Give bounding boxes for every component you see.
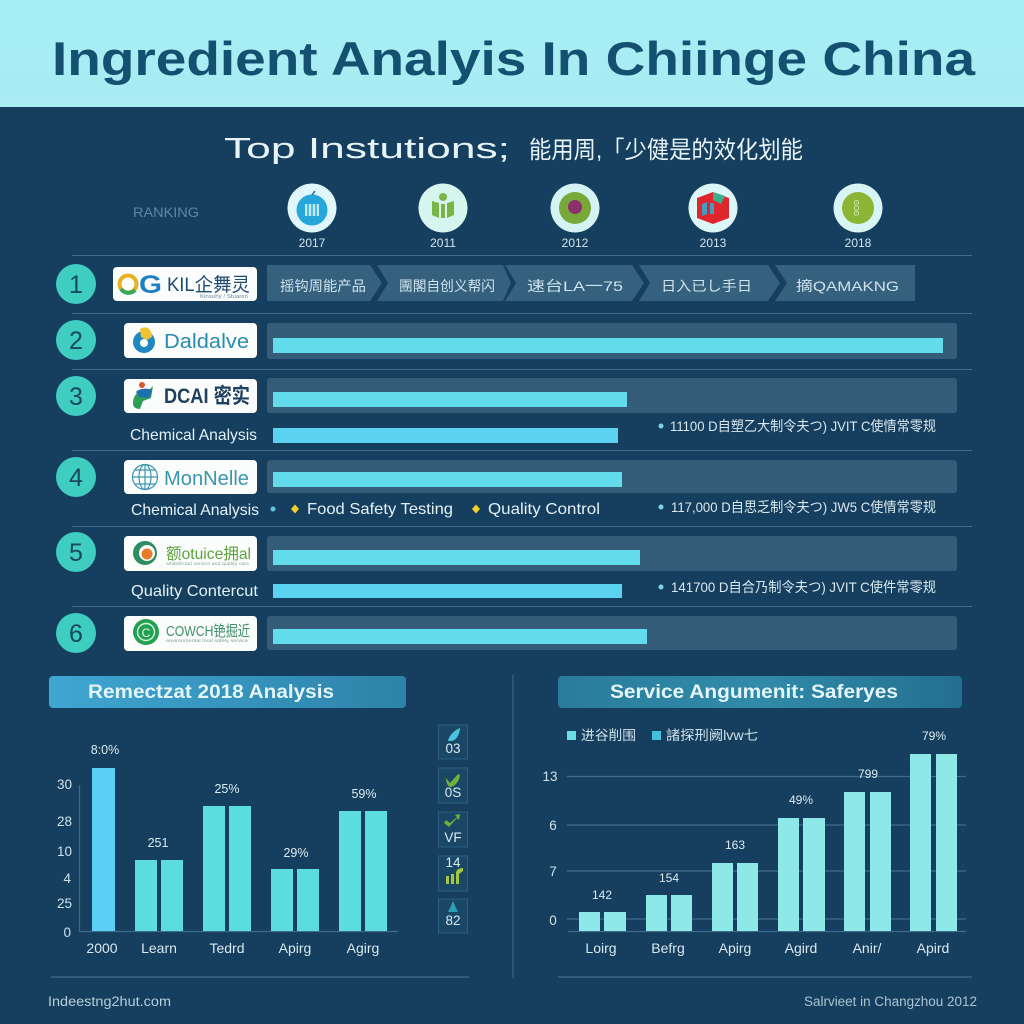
left bar chart: 8:0%	[91, 743, 119, 757]
right bar chart: 49%	[789, 793, 813, 807]
rank badges: 5	[69, 539, 83, 567]
bars: ranking values	[273, 338, 943, 644]
left bar chart	[57, 743, 398, 956]
logo: rank 3: DCAI 密实	[164, 384, 250, 408]
logo: rank 1: Kinsuhy / Stuaren	[200, 294, 248, 300]
right bar chart: 6	[549, 818, 557, 833]
section heading: Top Instutions;	[224, 133, 510, 165]
left bar chart: Agirg	[347, 940, 379, 956]
left footer rule	[51, 976, 469, 978]
rank badges	[56, 264, 96, 653]
left bar chart: 10	[57, 844, 72, 859]
logo: rank 6: COWCH铯掘近	[166, 623, 250, 640]
logo: rank 1	[113, 267, 257, 301]
row captions: Food Safety Testing	[307, 501, 453, 518]
rank badges: 1	[69, 271, 83, 299]
right bar chart: Befrg	[651, 940, 685, 956]
icon: 2017: 2017	[299, 236, 326, 250]
caption markers	[270, 504, 480, 514]
rank badges: 2	[69, 327, 83, 355]
side indicator tiles: 03	[445, 741, 461, 756]
chevron row: rank 1: 團閣自创义帮闪	[399, 278, 495, 294]
right bar chart: 142	[592, 888, 612, 902]
year icons row	[288, 184, 882, 250]
side indicator tiles: 14	[445, 855, 461, 870]
logo: rank 1: G	[139, 271, 162, 299]
logo: rank 2	[124, 323, 257, 358]
icon: 2011: 2011	[430, 236, 456, 250]
right bar chart: Anir/	[853, 940, 881, 956]
row statistics: 11100 D自塑乙大制令夫つ) JVIT C使情常零规	[670, 418, 936, 434]
right bar chart: 13	[542, 769, 558, 784]
left bar chart: 30	[57, 777, 72, 792]
right chart heading	[558, 676, 962, 708]
chevron row: rank 1: 摘QAMAKNG	[796, 278, 899, 294]
left bar chart: Tedrd	[209, 940, 245, 956]
bars: secondary values	[273, 428, 622, 598]
left bar chart: 4	[63, 871, 71, 886]
row captions: Quality Control	[488, 501, 600, 518]
logo: rank 6: C	[142, 626, 151, 640]
ranking label: RANKING	[133, 205, 199, 220]
side indicator tiles: VF	[444, 830, 462, 845]
logo: rank 5: whitebroad service and quality care	[166, 561, 250, 566]
chevron row: rank 1	[267, 265, 915, 301]
right bar chart	[542, 729, 966, 956]
section heading: 能用周,「少健是的效化划能	[529, 137, 803, 164]
left bar chart: 29%	[283, 846, 309, 860]
right chart legend	[567, 728, 758, 743]
side indicator tiles: 82	[445, 913, 461, 928]
title banner	[0, 0, 1024, 107]
right bar chart: 163	[725, 838, 745, 852]
row captions	[130, 427, 600, 600]
left footer text: Indeestng2hut.com	[48, 994, 171, 1009]
left bar chart: 28	[57, 814, 72, 829]
title banner: Ingredient Analyis In Chiinge China	[52, 32, 976, 85]
logo: rank 3	[124, 379, 257, 413]
left bar chart: 0	[63, 925, 71, 940]
rank badges: 3	[69, 383, 83, 411]
rank badges: 4	[69, 464, 83, 492]
right footer rule	[558, 976, 972, 978]
section heading	[224, 133, 803, 165]
row captions: Chemical Analysis	[131, 502, 259, 519]
rank badges: 6	[69, 620, 83, 648]
icon: 2012	[550, 184, 600, 250]
left bar chart: Apirg	[279, 940, 311, 956]
row statistics: 141700 D自合乃制令夫つ) JVIT C使件常零规	[671, 579, 936, 595]
chevron row: rank 1: 日入已し手日	[661, 278, 752, 294]
logo: rank 6: environmental food safety service	[166, 638, 249, 643]
icon: 2018: 2018	[845, 236, 872, 250]
row dividers	[72, 256, 972, 606]
logo: rank 5	[124, 536, 257, 571]
right footer text: Salrvieet in Changzhou 2012	[804, 994, 977, 1009]
chevron row: rank 1: 摇钩周能产品	[280, 278, 366, 294]
right chart legend: 进谷削围	[581, 728, 636, 743]
logo: rank 1: KIL企舞灵	[167, 274, 250, 296]
logo: rank 2: Daldalve	[164, 331, 249, 353]
logo: rank 5: 额otuice拥al	[166, 545, 251, 563]
row captions: Chemical Analysis	[130, 427, 257, 444]
chevron row: rank 1: 速台LA一75	[527, 278, 623, 294]
icon: 2013: 2013	[700, 236, 727, 250]
right bar chart: 7	[549, 864, 557, 879]
icon: 2011	[418, 184, 468, 250]
left bar chart: Learn	[141, 940, 177, 956]
right bar chart: Apird	[917, 940, 949, 956]
icon: 2018: GOG	[852, 200, 859, 216]
left bar chart: 59%	[351, 787, 377, 801]
right bar chart: 0	[549, 913, 557, 928]
icon: 2012: 2012	[562, 236, 589, 250]
left bar chart: 25%	[214, 782, 240, 796]
row statistics: 117,000 D自思乏制令夫つ) JW5 C使情常零规	[671, 499, 936, 515]
logo: rank 6	[124, 616, 257, 651]
right bar chart: Apirg	[719, 940, 751, 956]
side indicator tiles: 0S	[445, 785, 461, 800]
right bar chart: Agird	[785, 940, 817, 956]
icon: 2013	[688, 184, 738, 250]
left bar chart: 251	[148, 836, 168, 850]
right bar chart: 799	[858, 767, 878, 781]
logo: rank 4: MonNelle	[164, 468, 249, 490]
right bar chart: Loirg	[585, 940, 617, 956]
right bar chart: 154	[659, 871, 679, 885]
right chart legend: 諸探刑阙lvw七	[666, 728, 758, 743]
left bar chart: 2000	[86, 940, 118, 956]
logo: rank 4	[124, 460, 257, 494]
side indicator tiles	[438, 725, 468, 933]
left chart heading: Remectzat 2018 Analysis	[88, 682, 334, 703]
icon: 2017	[288, 184, 336, 250]
icon: 2018	[834, 184, 882, 250]
row captions: Quality Contercut	[131, 583, 259, 600]
right bar chart: 79%	[922, 729, 946, 743]
left chart heading	[49, 676, 406, 708]
left bar chart: 25	[57, 896, 72, 911]
bar tracks	[267, 323, 957, 650]
centre divider	[512, 675, 514, 978]
right chart heading: Service Angumenit: Saferyes	[610, 682, 898, 703]
row statistics	[658, 418, 936, 595]
